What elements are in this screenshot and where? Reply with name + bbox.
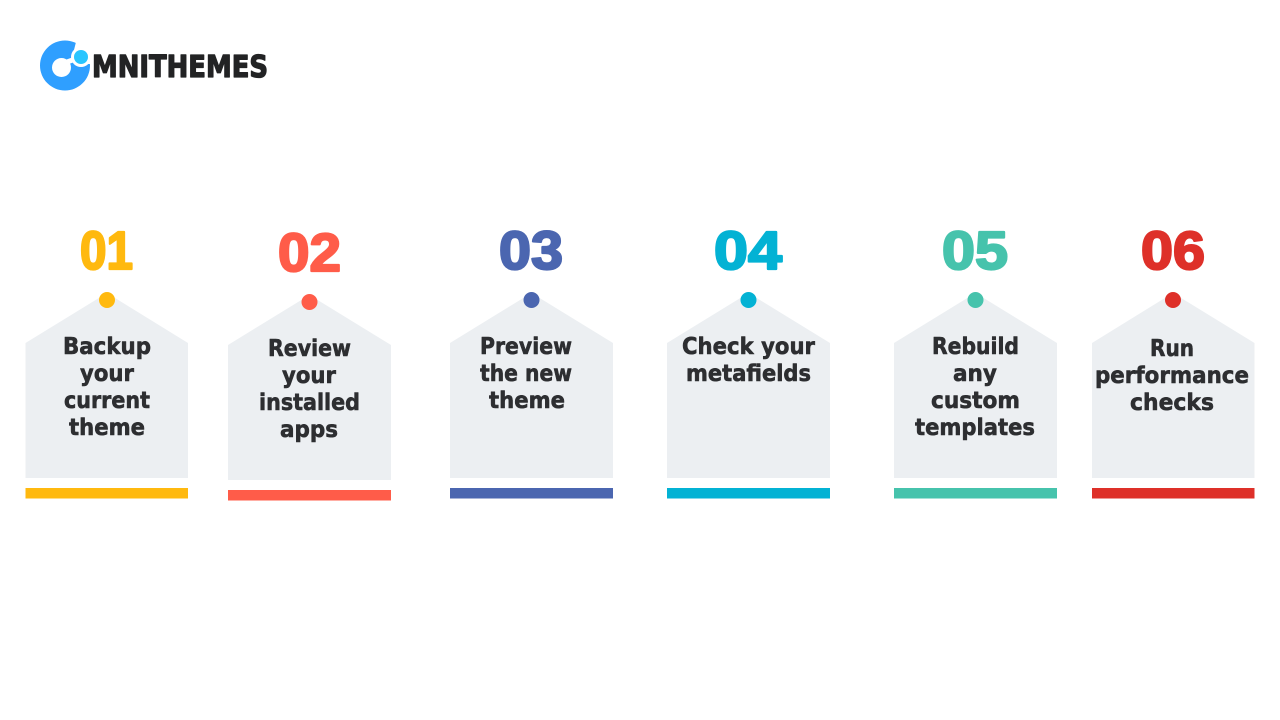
step label: Preview <box>480 332 572 360</box>
step label: theme <box>69 413 145 441</box>
color bar <box>1092 488 1254 498</box>
step label: Check your <box>682 332 815 360</box>
step label <box>915 332 1035 441</box>
number 03: 03 <box>499 221 563 281</box>
card shape <box>1092 293 1254 478</box>
number 05: 05 <box>942 221 1008 281</box>
panel: step 05 <box>894 221 1057 498</box>
number 02: 02 <box>278 223 341 283</box>
card shape <box>26 293 188 478</box>
number 01: 01 <box>80 221 133 281</box>
card shape <box>894 293 1057 478</box>
panel: step 03 <box>450 221 613 498</box>
step label: Backup <box>63 332 151 360</box>
panel: step 04 <box>667 221 830 498</box>
step label: the new <box>480 359 572 387</box>
logo: Omnithemes <box>40 38 268 90</box>
color bar <box>894 488 1057 498</box>
icon: logo ring <box>40 38 100 90</box>
step label: checks <box>1130 388 1214 416</box>
marker dot <box>968 292 984 308</box>
step label: custom <box>931 386 1020 414</box>
marker dot <box>740 292 756 308</box>
color bar <box>450 488 613 498</box>
card shape <box>450 293 613 478</box>
marker dot <box>99 292 115 308</box>
color bar <box>667 488 830 498</box>
panel: step 06 <box>1092 221 1254 498</box>
step label: apps <box>280 415 338 443</box>
number 06: 06 <box>1141 221 1205 281</box>
logo wordmark: MNITHEMES <box>92 50 268 85</box>
step label: current <box>64 386 150 414</box>
step label: installed <box>259 388 360 416</box>
card shape <box>667 293 830 478</box>
step label <box>63 332 151 441</box>
step label: any <box>953 359 997 387</box>
step label: Run <box>1150 334 1194 362</box>
step label: Review <box>268 334 351 362</box>
number 04: 04 <box>714 221 782 281</box>
step label: metafields <box>686 359 811 387</box>
card shape <box>228 295 391 480</box>
step label <box>1095 334 1249 416</box>
step label <box>682 332 815 387</box>
color bar <box>26 488 188 498</box>
step label: your <box>80 359 134 387</box>
step label: theme <box>489 386 565 414</box>
step label: Rebuild <box>932 332 1019 360</box>
marker dot <box>302 294 318 310</box>
panel: step 02 <box>228 223 391 500</box>
step label <box>480 332 572 414</box>
panel: step 01 <box>26 221 188 498</box>
marker dot <box>524 292 540 308</box>
marker dot <box>1165 292 1181 308</box>
color bar <box>228 490 391 500</box>
step label: your <box>282 361 336 389</box>
step label <box>259 334 360 443</box>
step label: performance <box>1095 361 1249 389</box>
step label: templates <box>915 413 1035 441</box>
